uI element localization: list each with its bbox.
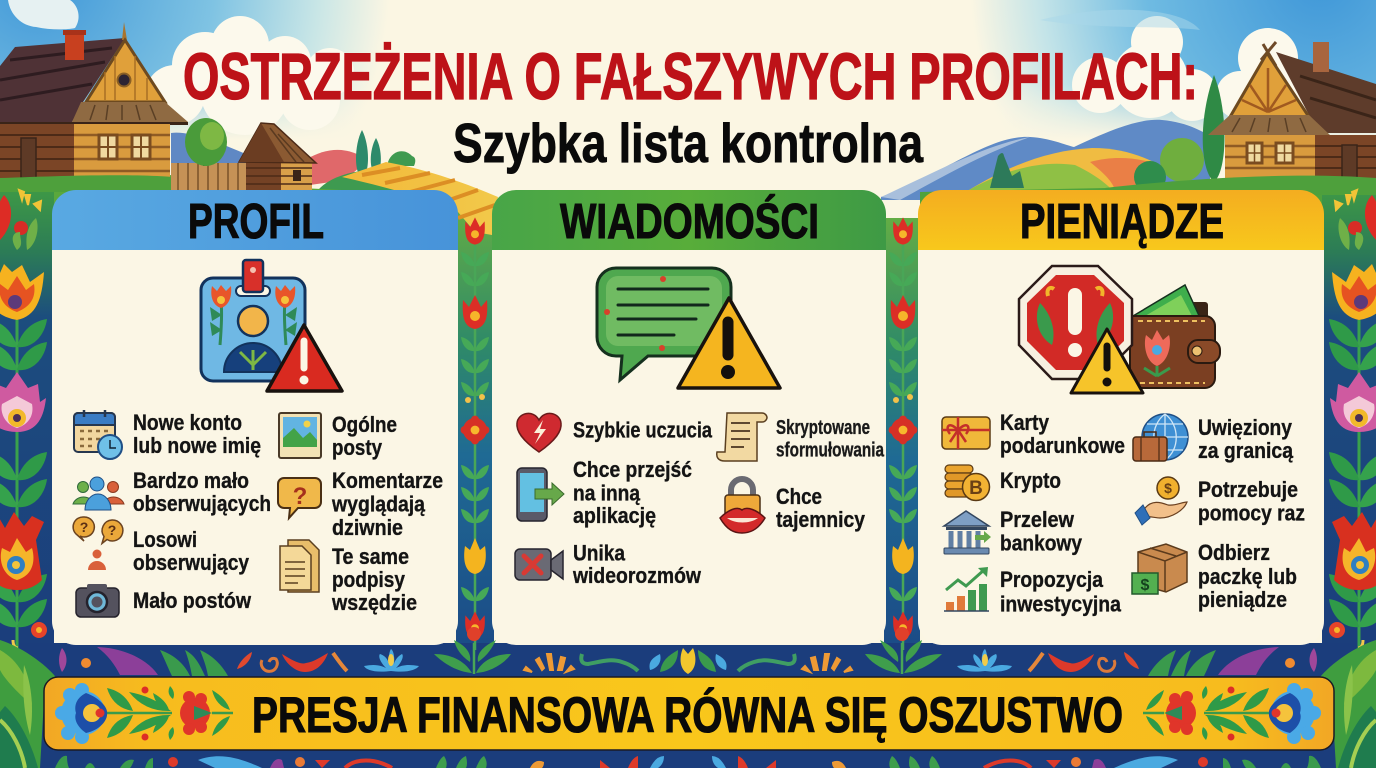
text: szybkie uczucia: Szybkie uczucia [573,418,712,442]
text: chce przejść: Chce przejść [573,457,692,482]
text: uwięziony [1198,415,1293,463]
text: komentarze: Komentarze [332,468,443,493]
list item: nowe konto [74,410,261,459]
text: bardzo mało: Bardzo mało [133,468,249,493]
panel: pieniądze [918,190,1324,645]
text: komentarze: dziwnie [332,515,403,540]
icon: id badge with warning triangle [201,260,342,391]
text: nowe konto [133,410,261,458]
icon: bank [944,511,991,554]
icon: folk flower right [1143,683,1321,744]
text: chce przejść [573,457,692,528]
text: bardzo mało: obserwujących [133,491,271,516]
list item: te same podpisy [280,540,417,615]
text: skryptowane: Skryptowane [776,417,870,439]
yellow field [342,162,498,235]
banner text: PRESJA FINANSOWA RÓWNA SIĘ OSZUSTWO [252,687,1123,743]
text: ogólne posty: posty [332,435,382,460]
cypress trees [356,130,381,177]
heading: pieniądze: PIENIĄDZE [1020,195,1224,249]
text: unika wideorozmów: Unika [573,540,625,566]
text: skryptowane [776,417,885,462]
list item: unika wideorozmów [515,540,701,588]
text: nowe konto: Nowe konto [133,410,242,435]
icon: camera [76,584,119,617]
text: uwięziony: za granicą [1198,438,1293,463]
text: karty podarunkowe [1000,410,1125,458]
side columns [0,186,54,656]
hills right [881,120,1210,200]
icon: documents [280,540,319,592]
text: chce przejść: na inną [573,480,640,506]
text: ogólne posty: Ogólne [332,412,397,437]
text: uwięziony: Uwięziony [1198,415,1292,440]
text: chce tajemnicy: tajemnicy [776,507,865,532]
icon: photo [279,413,321,458]
list item: propozycja inwestycyjna [944,567,1121,616]
list item: skryptowane sformułowania [717,413,885,462]
bottom folk ornament band [55,627,1321,768]
text: propozycja: inwestycyjna [1000,592,1121,616]
text: te same podpisy: wszędzie [331,590,417,615]
icon: group of people [73,477,124,510]
icon: folk flower left [55,683,233,744]
list item: komentarze [278,468,443,540]
panel: profil [52,190,458,645]
heading: wiadomości: WIADOMOŚCI [560,194,819,249]
text: karty podarunkowe: podarunkowe [1000,433,1125,458]
smoke cloud [8,0,79,29]
text: odbierz: Odbierz [1198,540,1270,565]
text: losowi: Losowi [133,527,197,552]
icon: coins and bitcoin: B [969,478,983,499]
bottom band [0,643,1376,768]
icon: question speech bubble [278,478,321,518]
icon: question speech bubble: ? [293,483,307,510]
text: te same podpisy: Te same [332,544,409,569]
text: chce tajemnicy: Chce [776,484,822,509]
text: krypto: Krypto [1000,468,1061,493]
text: przelew bankowy: bankowy [1000,530,1082,556]
text: propozycja: Propozycja [1000,567,1103,592]
icon: stop sign, wallet and warning [1019,266,1220,393]
text: potrzebuje: Potrzebuje [1198,477,1298,502]
side flower columns [0,190,1376,650]
list item: odbierz paczkę [1132,540,1297,612]
text: losowi [133,527,249,575]
text: odbierz: pieniądze [1198,587,1287,612]
tree, hut and fence [171,118,316,190]
icon: question bubbles and person: ? [80,519,88,535]
list item: losowi obserwujący [73,517,249,575]
icon: globe and suitcase [1133,414,1188,461]
icon: parcel with cash: $ [1141,577,1150,594]
text: potrzebuje [1198,477,1305,526]
text: ogólne posty [332,412,397,460]
corner leaves [0,640,1376,768]
text: unika wideorozmów [572,540,701,588]
text: przelew bankowy: Przelew [1000,507,1074,532]
list item: bardzo mało obserwujących [73,468,271,516]
list item: potrzebuje pomocy raz [1135,477,1305,526]
banner: bottom message [44,677,1334,750]
icon: calendar with clock [74,410,122,459]
list item: krypto [945,465,1061,500]
icon: scroll [717,413,767,461]
gutter flower columns [461,217,917,650]
text: losowi: obserwujący [133,550,249,575]
panel: wiadomości [492,190,886,645]
icon: speech bubble with warning triangle [597,268,780,388]
icon: hand with coin: $ [1164,480,1172,496]
icon: growth chart [944,567,989,611]
text: odbierz: paczkę lub [1198,564,1297,589]
text: mało postów: Mało postów [133,588,251,613]
list item: mało postów [76,584,251,617]
house: right log cabin [1105,42,1376,195]
icon: phone with arrow [517,468,564,521]
icon: question bubbles and person [73,517,123,570]
icon: hand with coin [1135,477,1187,525]
text: karty podarunkowe: Karty [1000,410,1049,435]
list item: chce tajemnicy [720,479,865,533]
text: nowe konto: lub nowe imię [133,433,261,458]
heading: profil: PROFIL [188,195,324,249]
icon: heart with lightning [517,413,561,452]
text: odbierz [1198,540,1297,612]
cloud right [1072,16,1326,126]
text: potrzebuje: pomocy raz [1198,500,1305,526]
cloud left [145,16,354,135]
text: przelew bankowy [1000,507,1082,556]
icon: question bubbles and person: ? [108,522,116,538]
text: skryptowane: sformułowania [776,440,885,462]
subtitle: Szybka lista kontrolna [453,112,923,174]
text: te same podpisy [331,544,417,615]
text: chce przejść: aplikację [573,503,656,528]
text: chce tajemnicy [776,484,865,532]
list item: uwięziony za granicą [1133,414,1293,463]
list item: przelew bankowy [944,507,1082,556]
hills left [171,133,300,190]
icon: gift card [942,417,990,449]
icon: parcel with cash [1132,544,1187,594]
list item: ogólne posty [279,412,397,460]
text: unika wideorozmów: wideorozmów [572,563,701,588]
icon: video camera crossed [515,549,563,580]
list item: szybkie uczucia [517,413,712,452]
text: te same podpisy: podpisy [332,567,405,592]
text: bardzo mało [133,468,271,516]
green hills [0,174,342,260]
icon: padlock with lips [720,479,765,533]
house: left log cabin [0,22,200,192]
text: komentarze: wyglądają [331,492,425,516]
list item: karty podarunkowe [942,410,1125,458]
list item: chce przejść [517,457,692,528]
text: komentarze [331,468,443,540]
text: propozycja [1000,567,1121,616]
